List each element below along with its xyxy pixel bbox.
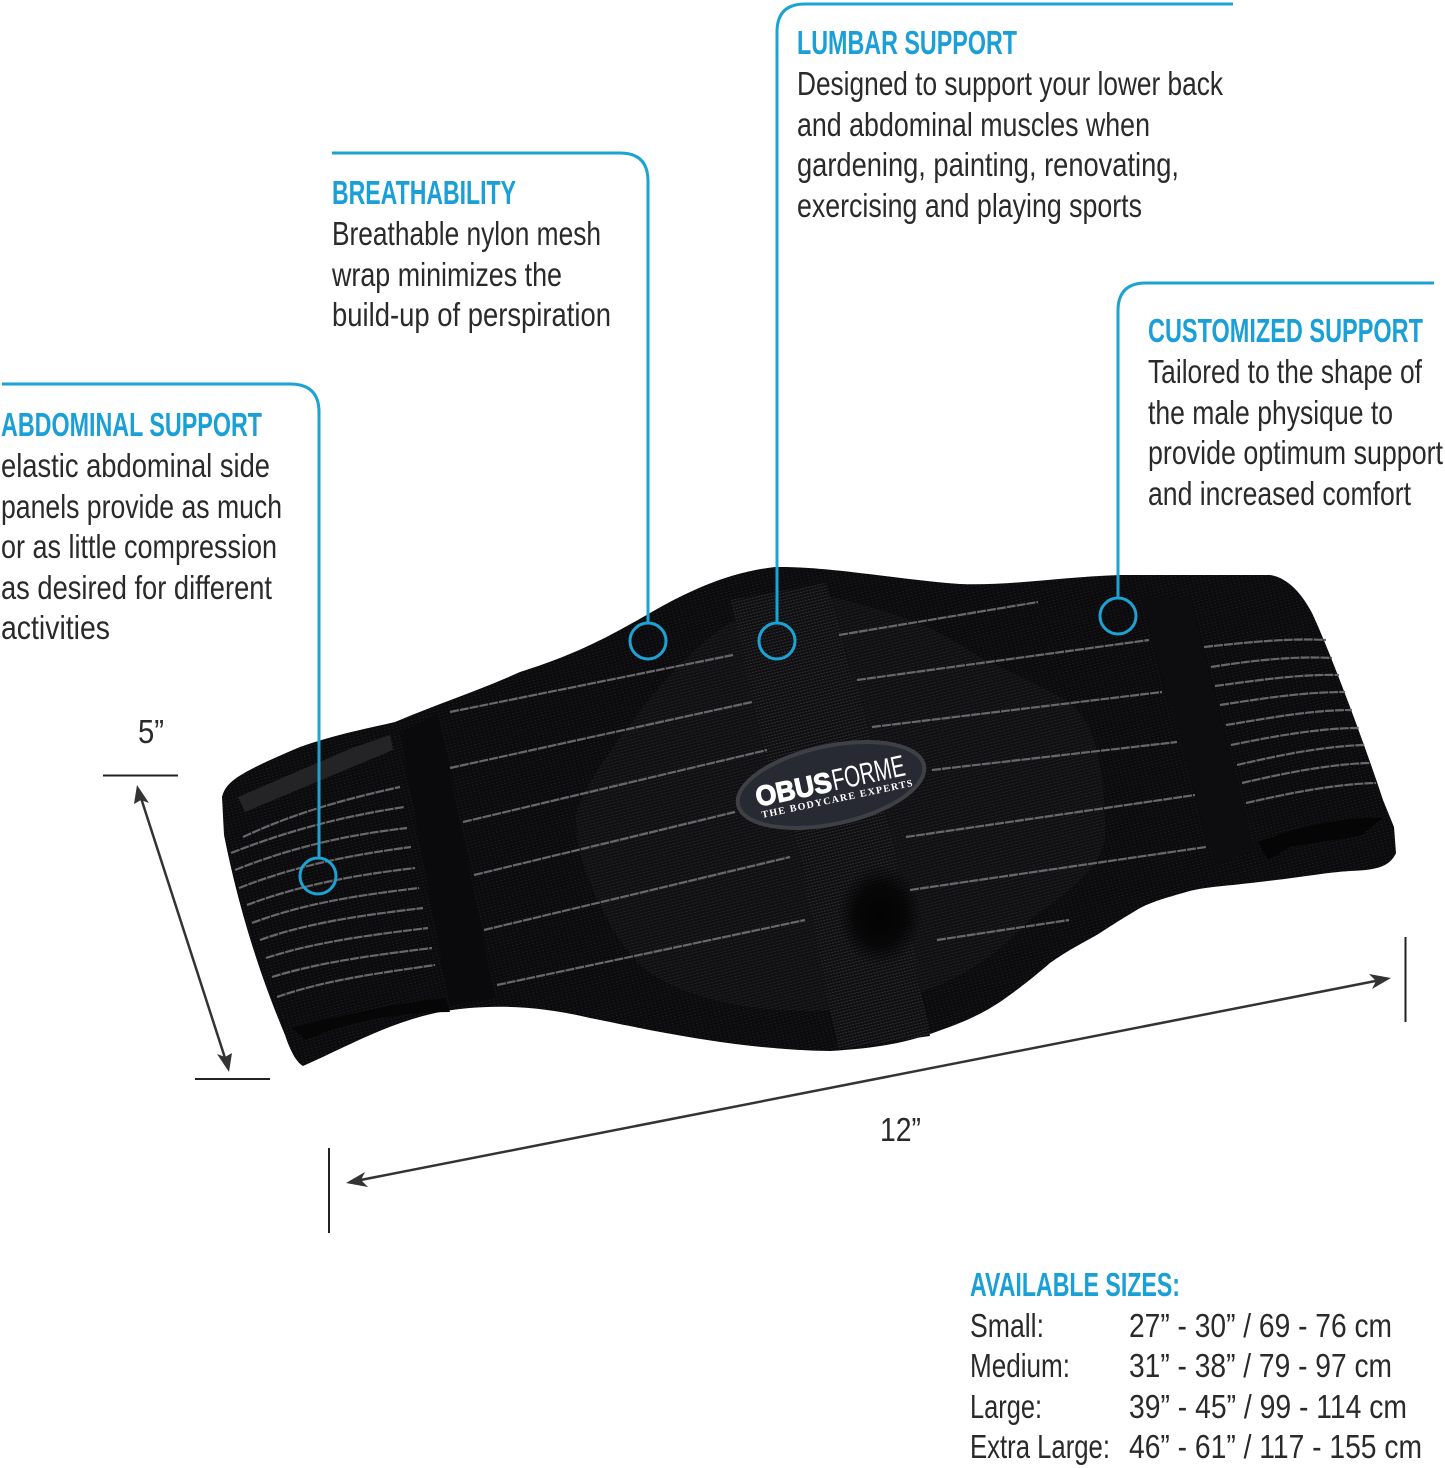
strap shadow (838, 865, 922, 965)
callout: customized support (1100, 283, 1443, 634)
body text: panels provide as much (1, 488, 282, 525)
heading: AVAILABLE SIZES: (970, 1266, 1180, 1303)
bottom tick (195, 1078, 270, 1080)
body text: elastic abdominal side (1, 447, 270, 484)
central stripes (450, 602, 1206, 985)
logo badge: FORME (829, 750, 908, 797)
arrowhead left (346, 1172, 368, 1187)
marker circle (1100, 598, 1136, 634)
leader line (1118, 283, 1434, 598)
logo badge: OBUS (753, 766, 834, 813)
left side panel band (400, 713, 495, 1007)
right tick (1404, 937, 1406, 1022)
body text (1148, 353, 1443, 512)
body text: the male physique to (1148, 394, 1393, 431)
body text: Designed to support your lower back (797, 65, 1223, 102)
body text: gardening, painting, renovating, (797, 146, 1179, 183)
top tick (103, 774, 178, 776)
heading: LUMBAR SUPPORT (797, 24, 1017, 61)
logo badge: THE BODYCARE EXPERTS (761, 778, 914, 821)
callout: abdominal support (1, 384, 336, 894)
body text: as desired for different (1, 569, 272, 606)
marker circle (759, 623, 795, 659)
body text: exercising and playing sports (797, 187, 1142, 224)
left elastic stripes (231, 787, 435, 997)
left tick (328, 1148, 330, 1233)
back support belt photo (222, 567, 1396, 1066)
body text (1, 447, 282, 646)
size rows: Extra Large: (970, 1428, 1110, 1465)
dimension: 12 inch length (329, 937, 1406, 1233)
leader line (777, 4, 1233, 623)
lumbar pad (576, 597, 1105, 1011)
logo badge (730, 727, 932, 843)
arrowhead bottom (217, 1053, 232, 1072)
body text: build-up of perspiration (332, 296, 611, 333)
marker circle (630, 623, 666, 659)
callout: lumbar support (759, 4, 1233, 659)
callout: breathability (331, 153, 666, 659)
dimension: 5 inch width (103, 713, 270, 1079)
heading: ABDOMINAL SUPPORT (1, 406, 262, 443)
arrow line (358, 980, 1378, 1180)
right side panel band (1140, 597, 1255, 865)
available sizes table (970, 1266, 1422, 1465)
body text: activities (1, 609, 110, 646)
lower vertical strap (795, 808, 930, 1049)
right elastic stripes (1204, 639, 1376, 803)
body text: Breathable nylon mesh (332, 215, 601, 252)
arrowhead top (134, 785, 149, 804)
marker circle (300, 858, 336, 894)
size rows: 27” - 30” / 69 - 76 cm (1129, 1307, 1392, 1344)
size rows: Large: (970, 1388, 1042, 1425)
body text (331, 215, 611, 333)
arrow line (141, 798, 225, 1058)
size rows (970, 1307, 1422, 1465)
size rows: Small: (970, 1307, 1044, 1344)
size rows: 39” - 45” / 99 - 114 cm (1129, 1388, 1407, 1425)
label: 12” (880, 1111, 921, 1148)
size rows: 31” - 38” / 79 - 97 cm (1129, 1347, 1392, 1384)
top-left light woven patch (238, 735, 393, 812)
arrowhead right (1369, 974, 1391, 989)
leader line (2, 384, 319, 858)
upper vertical strap (730, 583, 872, 770)
leader line (332, 153, 648, 623)
heading: BREATHABILITY (332, 174, 516, 211)
body text (797, 65, 1223, 224)
body text: wrap minimizes the (331, 256, 562, 293)
body text: and abdominal muscles when (797, 106, 1150, 143)
right fold shadow (1258, 818, 1383, 860)
left flap fold (292, 998, 450, 1040)
body text: or as little compression (1, 528, 277, 565)
size rows: Medium: (970, 1347, 1070, 1384)
belt body (222, 567, 1396, 1066)
label: 5” (138, 713, 164, 750)
